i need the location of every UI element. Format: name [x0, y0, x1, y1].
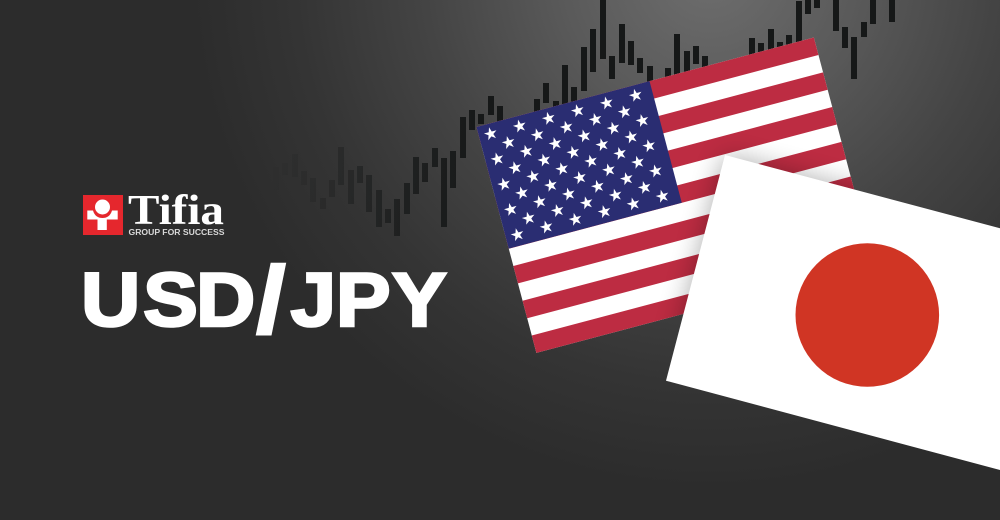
stars	[483, 87, 670, 242]
red sun disc	[796, 243, 939, 387]
shadow cast on US flag	[668, 146, 854, 318]
title: USD/JPY: Y	[392, 257, 447, 342]
title: USD/JPY: P	[336, 257, 391, 342]
title: USD/JPY: J	[291, 257, 336, 342]
logo: Tifia	[83, 188, 225, 237]
title: USD/JPY: /	[257, 247, 285, 352]
logo icon: red square	[83, 195, 123, 235]
logo wordmark: Tifia	[128, 188, 224, 234]
title: USD/JPY: U	[81, 257, 140, 342]
Japan flag	[666, 155, 1000, 470]
flag field and stripes	[476, 38, 874, 353]
candlestick chart	[273, 0, 895, 236]
US flag	[476, 38, 874, 353]
white field	[666, 155, 1000, 470]
title: USD/JPY: S	[143, 257, 198, 342]
title: USD/JPY: D	[196, 257, 255, 342]
logo tagline: GROUP FOR SUCCESS	[128, 228, 225, 237]
canton	[476, 81, 682, 249]
